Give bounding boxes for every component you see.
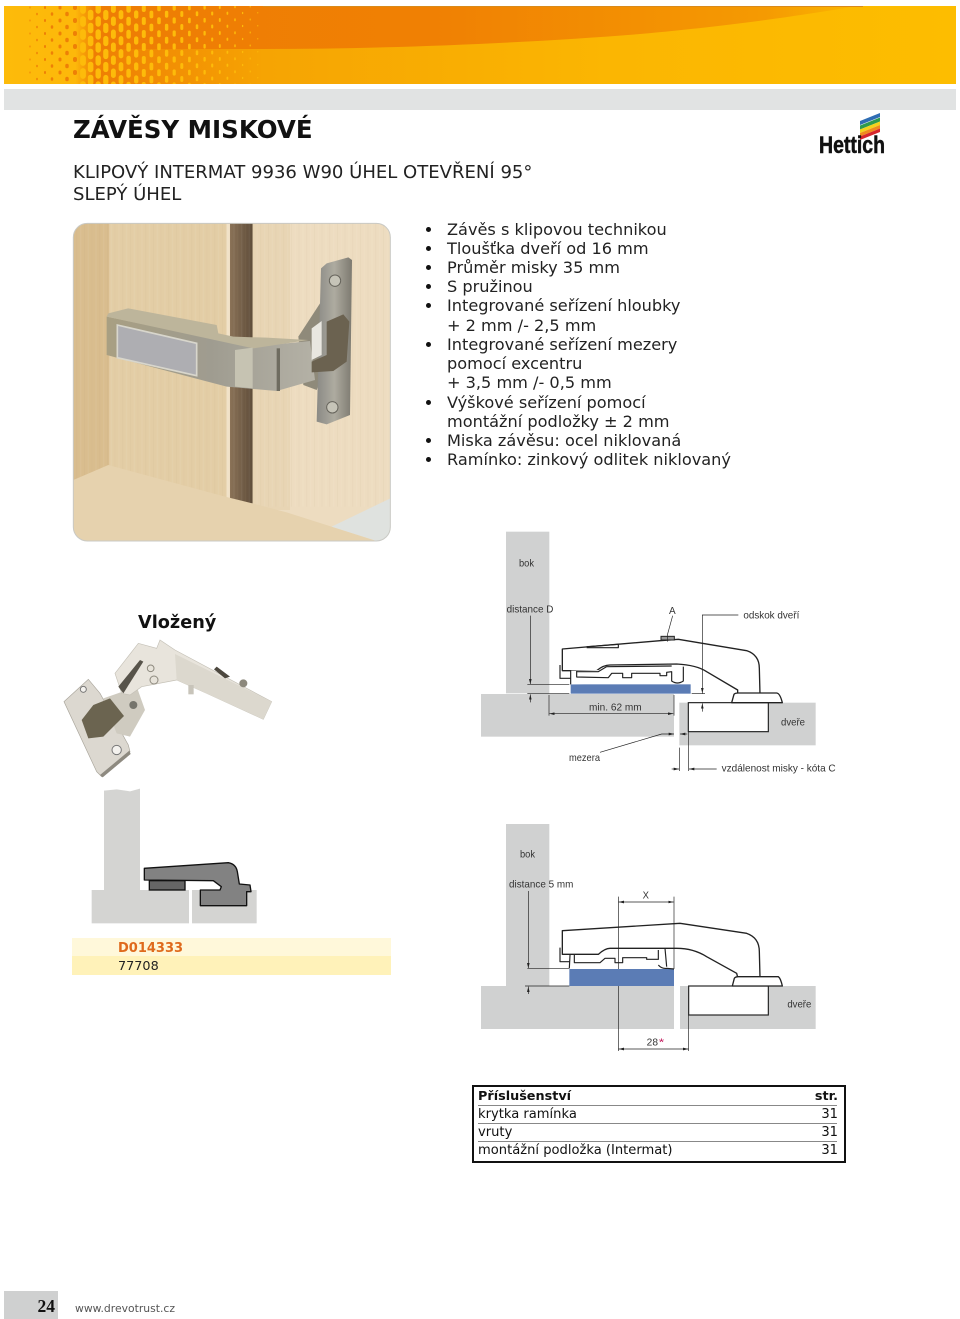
- table header: [478, 1089, 838, 1104]
- row: montážní podložka: 31: [821, 1143, 838, 1158]
- diagram: hinge dimensions, overlay: [481, 532, 836, 775]
- heading: Vložený: Vložený: [138, 613, 216, 633]
- photo: hinge product: [64, 640, 272, 778]
- feature list: montážní podložky ± 2 mm: [447, 412, 670, 431]
- row: krytka ramínka: 31: [821, 1107, 838, 1122]
- photo: mounted hinge on wood cabinet: [72, 222, 391, 542]
- feature list: Tloušťka dveří od 16 mm: [447, 239, 649, 258]
- diagram labels: distance D: [507, 605, 553, 616]
- diagram labels: [509, 849, 812, 1049]
- row: krytka ramínka: [478, 1105, 837, 1123]
- hinge in photo: [107, 257, 352, 424]
- diagram labels: dveře: [787, 1000, 812, 1011]
- article code: D014333: [118, 941, 183, 956]
- diagram labels: 28: [647, 1038, 658, 1049]
- row: montážní podložka: montážní podložka (Intermat): [478, 1143, 673, 1158]
- row: vruty: [478, 1123, 837, 1141]
- feature list: S pružinou: [447, 277, 533, 296]
- feature list: + 3,5 mm /- 0,5 mm: [447, 373, 612, 392]
- feature list: Miska závěsu: ocel niklovaná: [447, 431, 681, 450]
- diagram labels: X: [643, 890, 649, 901]
- diagram labels: vzdálenost misky - kóta C: [722, 764, 836, 775]
- page number box: 24: [38, 1296, 55, 1316]
- dimension lines: [525, 891, 689, 1051]
- title: ZÁVĚSY MISKOVÉ: [73, 115, 313, 144]
- order number: 77708: [118, 959, 159, 974]
- diagram labels: *: [659, 1038, 664, 1049]
- feature list: Průměr misky 35 mm: [447, 258, 620, 277]
- subtitle: [73, 162, 532, 204]
- hinge outline: [560, 636, 782, 703]
- hinge outline: [560, 923, 782, 986]
- page number box: [4, 1291, 58, 1319]
- accessories table: [472, 1085, 846, 1163]
- diagram labels: min. 62 mm: [589, 703, 642, 714]
- subtitle: SLEPÝ ÚHEL: [73, 184, 181, 204]
- diagram labels: bok: [519, 559, 535, 570]
- row: krytka ramínka: krytka ramínka: [478, 1107, 577, 1122]
- diagram labels: A: [669, 606, 676, 617]
- diagram: distance 5 mm mounting: [481, 824, 816, 1051]
- table header: str.: [815, 1089, 838, 1104]
- logo: Hettich: Hettich: [819, 132, 885, 159]
- top banner: [4, 6, 956, 84]
- feature list: Integrované seřízení mezery: [447, 335, 677, 354]
- feature list: Závěs s klipovou technikou: [447, 220, 667, 238]
- diagram labels: bok: [520, 849, 536, 860]
- logo: Hettich: [819, 113, 885, 159]
- row: vruty: 31: [821, 1125, 838, 1140]
- article code: [72, 938, 391, 956]
- table header: Příslušenství: [478, 1089, 571, 1104]
- grey header band: [4, 89, 956, 110]
- diagram labels: dveře: [781, 717, 805, 728]
- subtitle: KLIPOVÝ INTERMAT 9936 W90 ÚHEL OTEVŘENÍ 95°: [73, 162, 532, 183]
- feature list: + 2 mm /- 2,5 mm: [447, 316, 596, 335]
- feature list: Ramínko: zinkový odlitek niklovaný: [447, 450, 731, 469]
- dimension lines: [527, 615, 738, 771]
- diagram labels: distance 5 mm: [509, 879, 573, 890]
- diagram labels: odskok dveří: [743, 610, 799, 621]
- feature list: pomocí excentru: [447, 354, 582, 373]
- website footer: www.drevotrust.cz: [75, 1302, 175, 1315]
- feature list: [426, 220, 731, 469]
- row: vruty: vruty: [478, 1125, 512, 1140]
- feature list: Integrované seřízení hloubky: [447, 296, 680, 315]
- feature list: Výškové seřízení pomocí: [447, 393, 646, 412]
- diagram labels: mezera: [569, 753, 600, 764]
- article number band: [72, 938, 391, 975]
- diagram labels: [507, 559, 836, 775]
- diagram: simplified inset hinge section: [92, 788, 257, 924]
- row: montážní podložka: [478, 1141, 837, 1159]
